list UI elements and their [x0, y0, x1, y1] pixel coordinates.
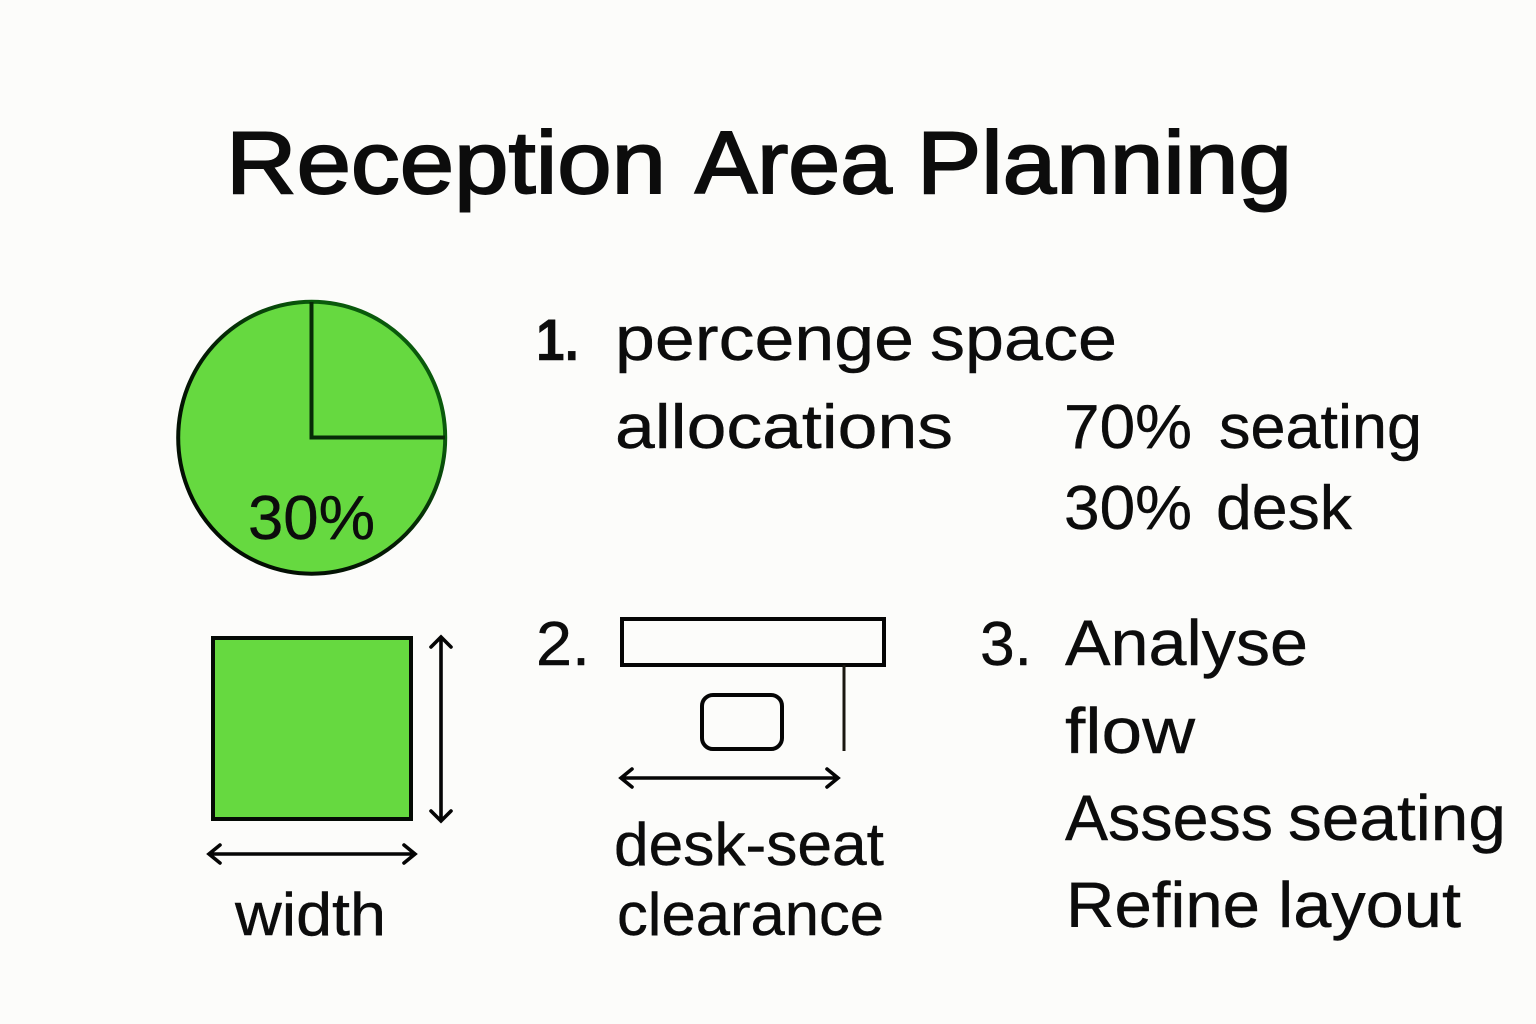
step 3: analyse flow: layout: [1278, 869, 1461, 941]
step 1: space allocations: 70%: [1064, 393, 1192, 462]
step 3: analyse flow: flow: [1065, 695, 1196, 767]
pie chart: 30%: 30%: [248, 484, 375, 553]
step 3: analyse flow: Assess: [1065, 782, 1273, 854]
pie chart: 30%: [178, 302, 445, 574]
square with dimension arrows: width: [234, 881, 386, 948]
step 1: space allocations: [536, 305, 1422, 543]
square with dimension arrows: [209, 637, 451, 948]
step 1: space allocations: 1.: [536, 308, 579, 373]
step 2: desk-seat clearance: [536, 610, 884, 948]
step 1: space allocations: allocations: [615, 393, 953, 462]
step 1: space allocations: seating: [1219, 393, 1422, 462]
step 3: analyse flow: seating: [1288, 782, 1506, 854]
step 1: space allocations: percenge: [615, 305, 914, 374]
step 1: space allocations: 30%: [1064, 474, 1192, 543]
step 3: analyse flow: Analyse: [1065, 607, 1308, 679]
title: Reception: [226, 113, 666, 212]
step 2: desk-seat clearance: desk-seat: [614, 811, 884, 878]
title: [226, 113, 1292, 212]
step 3: analyse flow: 3.: [980, 610, 1032, 679]
title: Planning: [917, 113, 1292, 212]
step 3: analyse flow: Refine: [1066, 869, 1260, 941]
title: Area: [695, 113, 892, 212]
step 1: space allocations: desk: [1216, 474, 1353, 543]
step 2: desk-seat clearance: 2.: [536, 610, 590, 679]
step 2: desk-seat clearance: clearance: [617, 881, 884, 948]
step 3: analyse flow: [980, 607, 1506, 941]
step 1: space allocations: space: [930, 305, 1117, 374]
